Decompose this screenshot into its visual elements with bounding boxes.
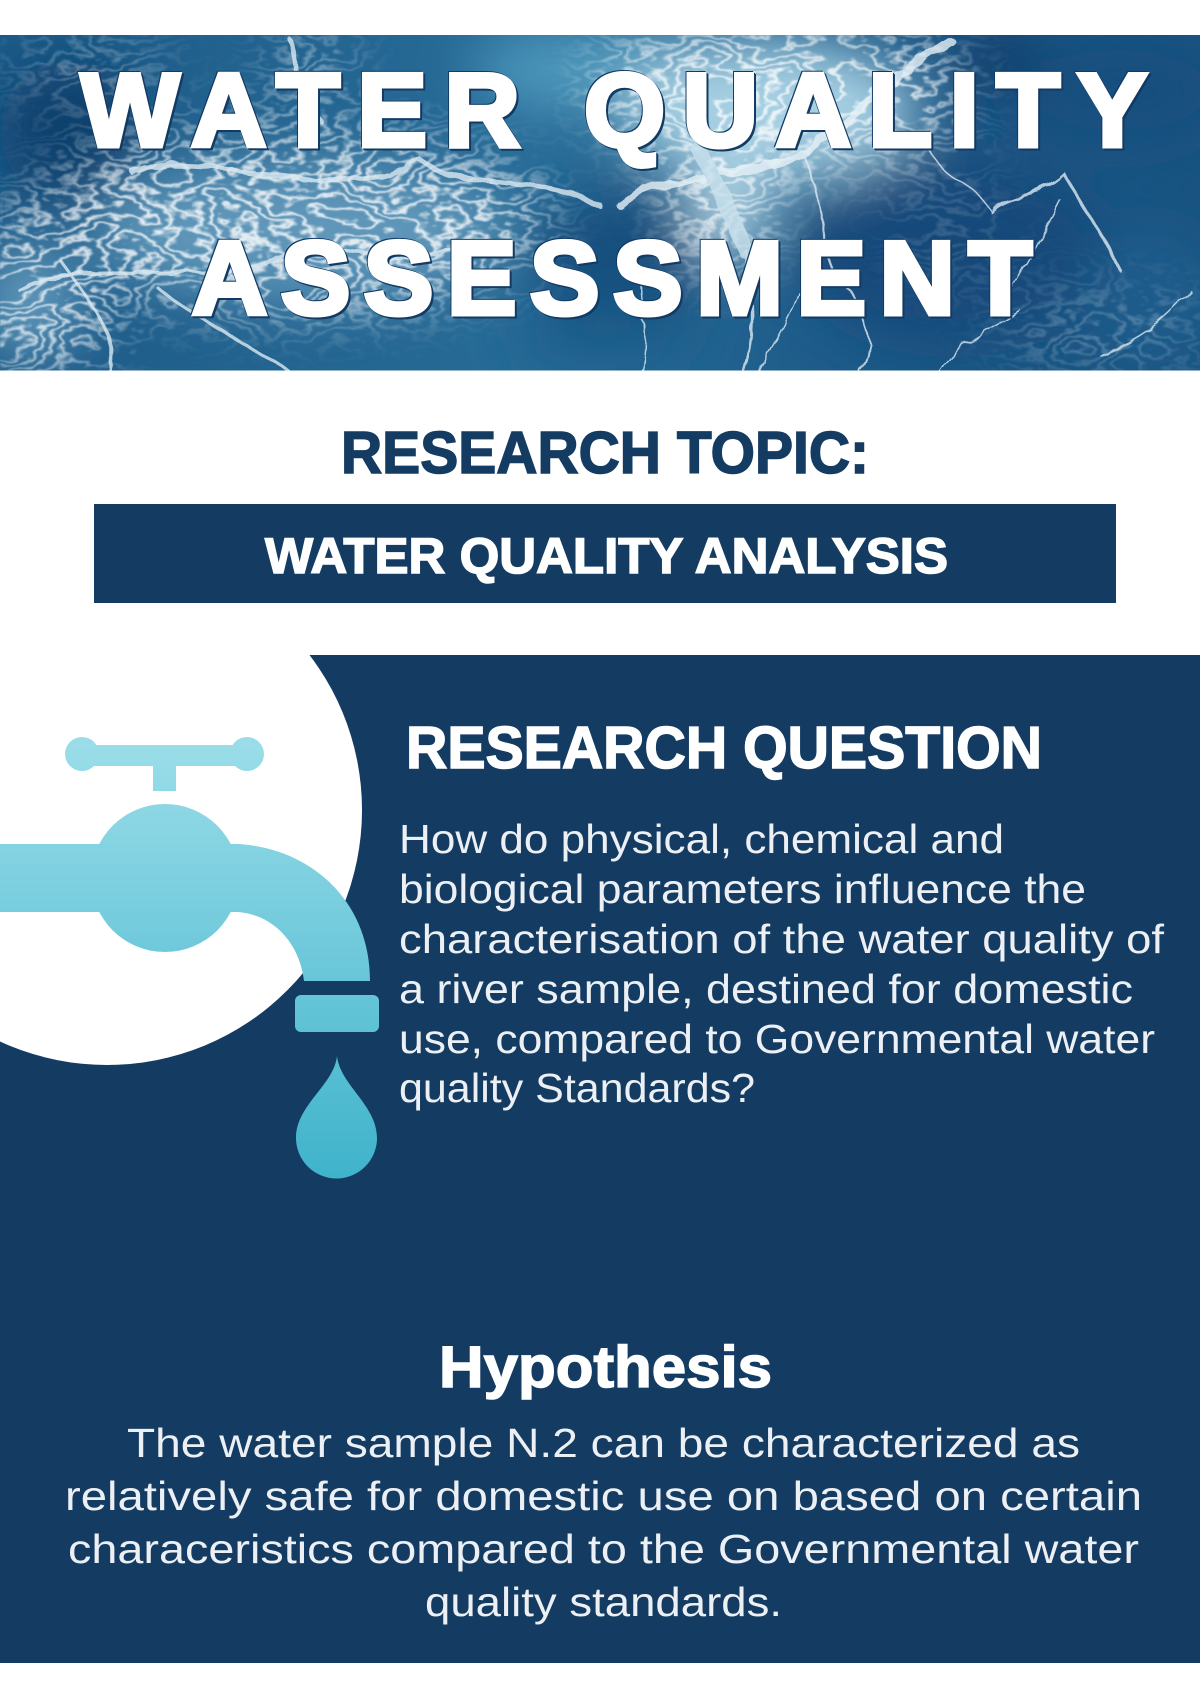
white circle behind faucet — [0, 655, 362, 1065]
text: research question body: a river sample, destined for domestic — [399, 966, 1133, 1012]
heading: hypothesis: Hypothesis — [439, 1335, 772, 1400]
panel: research question and hypothesis — [0, 555, 1200, 1663]
icon: water faucet with drop — [0, 737, 379, 1178]
text: research question body: characterisation of the water quality of — [399, 916, 1165, 962]
text: research question body — [399, 816, 1165, 1111]
title: water quality assessment: ASSESSMENT — [192, 221, 1032, 337]
banner bar: water quality analysis — [94, 504, 1116, 603]
heading: research topic: RESEARCH TOPIC: — [341, 420, 869, 486]
heading: research question: RESEARCH QUESTION — [406, 715, 1042, 781]
text: hypothesis body — [65, 1420, 1142, 1625]
text: hypothesis body: The water sample N.2 can be characterized as — [127, 1420, 1080, 1466]
text: research question body: use, compared to Governmental water — [399, 1016, 1155, 1062]
text: research question body: biological parameters influence the — [399, 866, 1086, 912]
banner bar: water quality analysis: WATER QUALITY ANALYSIS — [265, 528, 948, 584]
text: hypothesis body: quality standards. — [425, 1579, 782, 1625]
text: research question body: How do physical, chemical and — [399, 816, 1004, 862]
banner: ocean water photo background — [0, 25, 1200, 371]
title: water quality assessment: WATER QUALITY — [81, 53, 1147, 169]
text: research question body: quality Standards? — [399, 1065, 755, 1111]
text: hypothesis body: characeristics compared to the Governmental water — [68, 1526, 1139, 1572]
title: water quality assessment — [81, 53, 1147, 337]
text: hypothesis body: relatively safe for domestic use on based on certain — [65, 1473, 1142, 1519]
